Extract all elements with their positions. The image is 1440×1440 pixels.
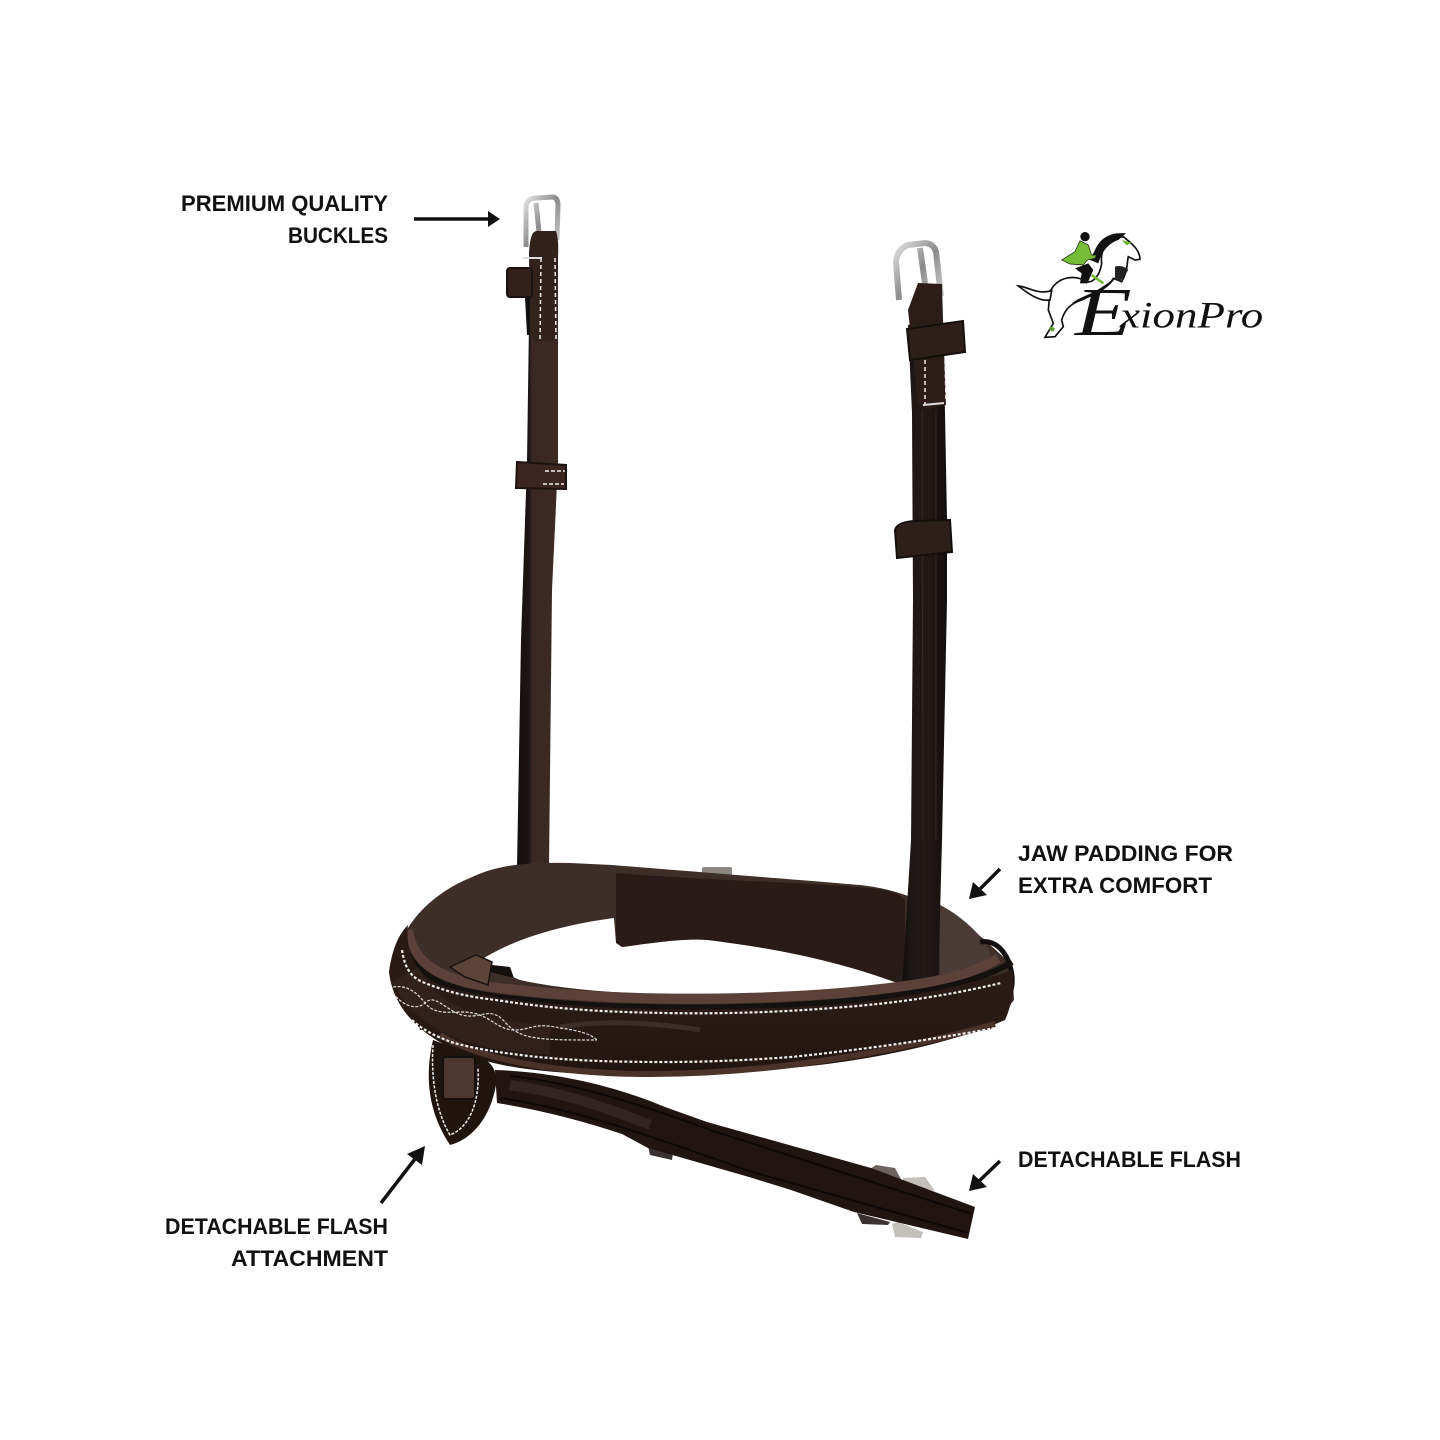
center tab behind pad — [702, 867, 732, 877]
left buckle — [526, 197, 558, 247]
label: jaw padding: JAW PADDING FOR — [1018, 841, 1233, 866]
arrow: to buckle — [414, 211, 500, 227]
left cheek strap — [507, 197, 566, 868]
logo: ExionPro — [1018, 232, 1263, 350]
left small keeper — [507, 268, 532, 297]
padding right of strap — [940, 905, 995, 985]
label: premium quality buckles: PREMIUM QUALITY — [181, 191, 388, 216]
left lower keeper — [516, 462, 566, 489]
label: detachable flash: DETACHABLE FLASH — [1018, 1147, 1241, 1172]
label: jaw padding — [1018, 841, 1233, 898]
flash strap metal tabs — [903, 1177, 935, 1191]
logo horse — [1045, 237, 1140, 337]
label: premium quality buckles: BUCKLES — [288, 223, 388, 248]
flash attachment leaf — [429, 1040, 496, 1145]
product photo: noseband — [389, 197, 1014, 1239]
logo rider — [1062, 241, 1097, 265]
right buckle — [896, 243, 941, 300]
right upper keeper — [907, 321, 965, 360]
label: detachable flash attachment: ATTACHMENT — [231, 1246, 389, 1271]
logo wordmark: E — [1074, 274, 1132, 350]
opening inside noseband — [478, 918, 905, 995]
padding back piece — [400, 863, 1014, 1030]
arrow: to jaw padding — [969, 869, 1000, 899]
arrow: to detachable flash — [969, 1161, 1000, 1191]
flash strap — [495, 1070, 975, 1239]
side ring — [980, 942, 1012, 1005]
rolled leather top layer — [408, 930, 998, 999]
label: detachable flash attachment — [165, 1214, 389, 1271]
label: jaw padding: EXTRA COMFORT — [1018, 873, 1213, 898]
label: detachable flash attachment: DETACHABLE FLASH — [165, 1214, 388, 1239]
label: premium quality buckles — [181, 191, 388, 248]
jaw pad dark piece — [616, 873, 905, 985]
front band — [389, 925, 1013, 1076]
logo: ExionPro: xionPro — [1119, 295, 1263, 336]
right lower keeper — [895, 520, 952, 558]
keeper on noseband — [450, 955, 492, 985]
fancy stitching — [393, 987, 597, 1040]
arrow: to flash attachment — [381, 1146, 425, 1203]
right cheek strap — [895, 243, 965, 990]
band stitching — [402, 950, 1001, 1013]
